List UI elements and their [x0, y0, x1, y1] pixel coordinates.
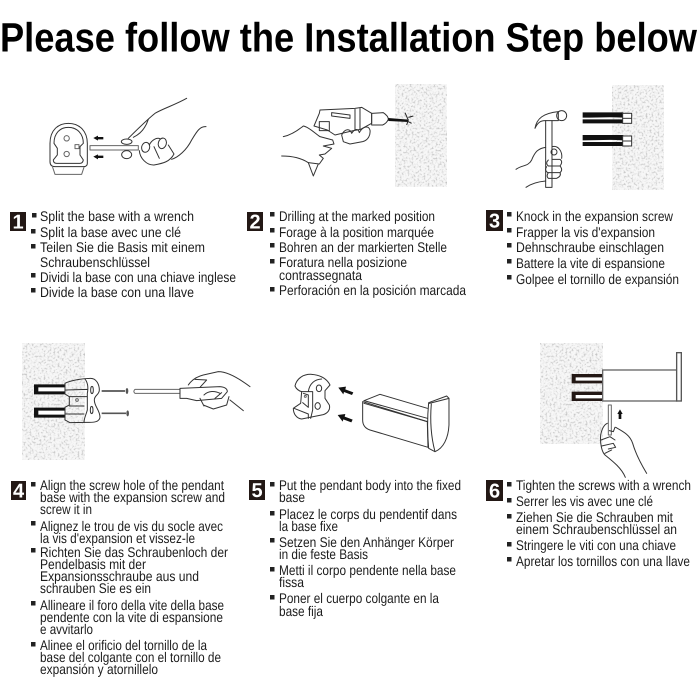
bullet markers — [270, 212, 274, 292]
step 5 text: Put the pendant body into the fixed — [279, 477, 461, 493]
panel: step 5 — [249, 374, 461, 619]
panel: step 4 — [11, 343, 250, 677]
step 6 text — [516, 477, 691, 569]
panel: step 6 — [486, 343, 691, 569]
step 3 text: Knock in the expansion screw — [516, 208, 674, 224]
panel: step 1 — [10, 98, 236, 300]
step 2 text: contrassegnata — [279, 267, 362, 283]
step 4 text: e avvitarlo — [40, 621, 93, 637]
bullet markers — [270, 482, 274, 600]
panel: step 2 — [247, 84, 466, 298]
number badge 5 — [249, 480, 265, 502]
step 5 text: in die feste Basis — [279, 546, 368, 562]
step 3 text — [516, 208, 679, 287]
step 2 text — [279, 208, 466, 298]
number badge 2 — [247, 212, 263, 234]
step 1 text: Schraubenschlüssel — [40, 254, 150, 270]
step 5 text: Setzen Sie den Anhänger Körper — [279, 534, 454, 550]
bullet markers — [507, 482, 512, 562]
step 4 text: Align the screw hole of the pendant — [40, 477, 224, 493]
step 4 text: Pendelbasis mit der — [40, 556, 146, 572]
step 1 text: Divide la base con una llave — [40, 284, 194, 300]
step 6 text: Ziehen Sie die Schrauben mit — [516, 509, 673, 525]
number badge 6 — [486, 480, 503, 502]
step 5 text: Metti il corpo pendente nella base — [279, 562, 456, 578]
number badge 2: 2 — [249, 212, 261, 234]
step 5 text: Poner el cuerpo colgante en la — [279, 590, 439, 606]
step 4 text: la vis d'expansion et vissez-le — [40, 530, 195, 546]
bullet markers — [31, 213, 36, 292]
step 4 text: pendente con la vite di espansione — [40, 609, 223, 625]
step 2 text: Drilling at the marked position — [279, 208, 435, 224]
step 2 text: Forage à la position marquée — [279, 224, 434, 240]
panel: step 3 — [486, 85, 679, 287]
step 1 text — [40, 208, 236, 300]
step 4 text: Expansionsschraube aus und — [40, 568, 199, 584]
step 5 text — [279, 477, 461, 619]
illustration: tighten screws with key — [540, 343, 681, 477]
step 1 text: Dividi la base con una chiave inglese — [40, 269, 236, 285]
number badge 3 — [486, 210, 503, 232]
step 5 text: base fija — [279, 603, 323, 619]
step 2 text: Foratura nella posizione — [279, 254, 407, 270]
step 6 text: einem Schraubenschlüssel an — [516, 521, 677, 537]
step 4 text: Alignez le trou de vis du socle avec — [40, 518, 223, 534]
number badge 1 — [10, 212, 26, 234]
step 5 text: fissa — [279, 574, 304, 590]
step 2 text: Bohren an der markierten Stelle — [279, 239, 447, 255]
step 4 text: base del colgante con el tornillo de — [40, 649, 221, 665]
number badge 1: 1 — [12, 212, 24, 234]
step 4 text — [40, 477, 228, 677]
step 5 text: la base fixe — [279, 518, 338, 534]
step 4 text: expansión y atornillelo — [40, 661, 158, 677]
step 4 text: screw it in — [40, 501, 92, 517]
step 1 text: Teilen Sie die Basis mit einem — [40, 239, 205, 255]
step 5 text: base — [279, 489, 305, 505]
step 5 text: Placez le corps du pendentif dans — [279, 506, 457, 522]
step 3 text: Frapper la vis d'expansion — [516, 224, 655, 240]
number badge 4: 4 — [13, 480, 25, 502]
illustration: screwing base to wall — [22, 343, 250, 460]
step 1 text: Split la base avec une clé — [40, 224, 181, 240]
bullet markers — [31, 482, 36, 646]
step 1 text: Split the base with a wrench — [40, 208, 194, 224]
step 4 text: base with the expansion screw and — [40, 489, 225, 505]
step 4 text: Alinee el orificio del tornillo de la — [40, 637, 207, 653]
bullet markers — [507, 212, 512, 280]
step 3 text: Dehnschraube einschlagen — [516, 239, 664, 255]
illustration: pendant body into base — [293, 374, 449, 452]
number badge 5: 5 — [251, 480, 263, 502]
number badge 6: 6 — [489, 480, 500, 502]
step 4 text: Allineare il foro della vite della base — [40, 597, 224, 613]
illustration: split the base with a wrench — [50, 98, 206, 174]
step 4 text: schrauben Sie es ein — [40, 580, 151, 596]
step 4 text: Richten Sie das Schraubenloch der — [40, 544, 228, 560]
step 6 text: Serrer les vis avec une clé — [516, 493, 653, 509]
illustration: hammering expansion screws — [516, 85, 664, 190]
step 3 text: Battere la vite di espansione — [516, 255, 665, 271]
step 2 text: Perforación en la posición marcada — [279, 282, 466, 298]
number badge 3: 3 — [489, 210, 500, 232]
illustration: drilling into wall — [282, 84, 447, 187]
